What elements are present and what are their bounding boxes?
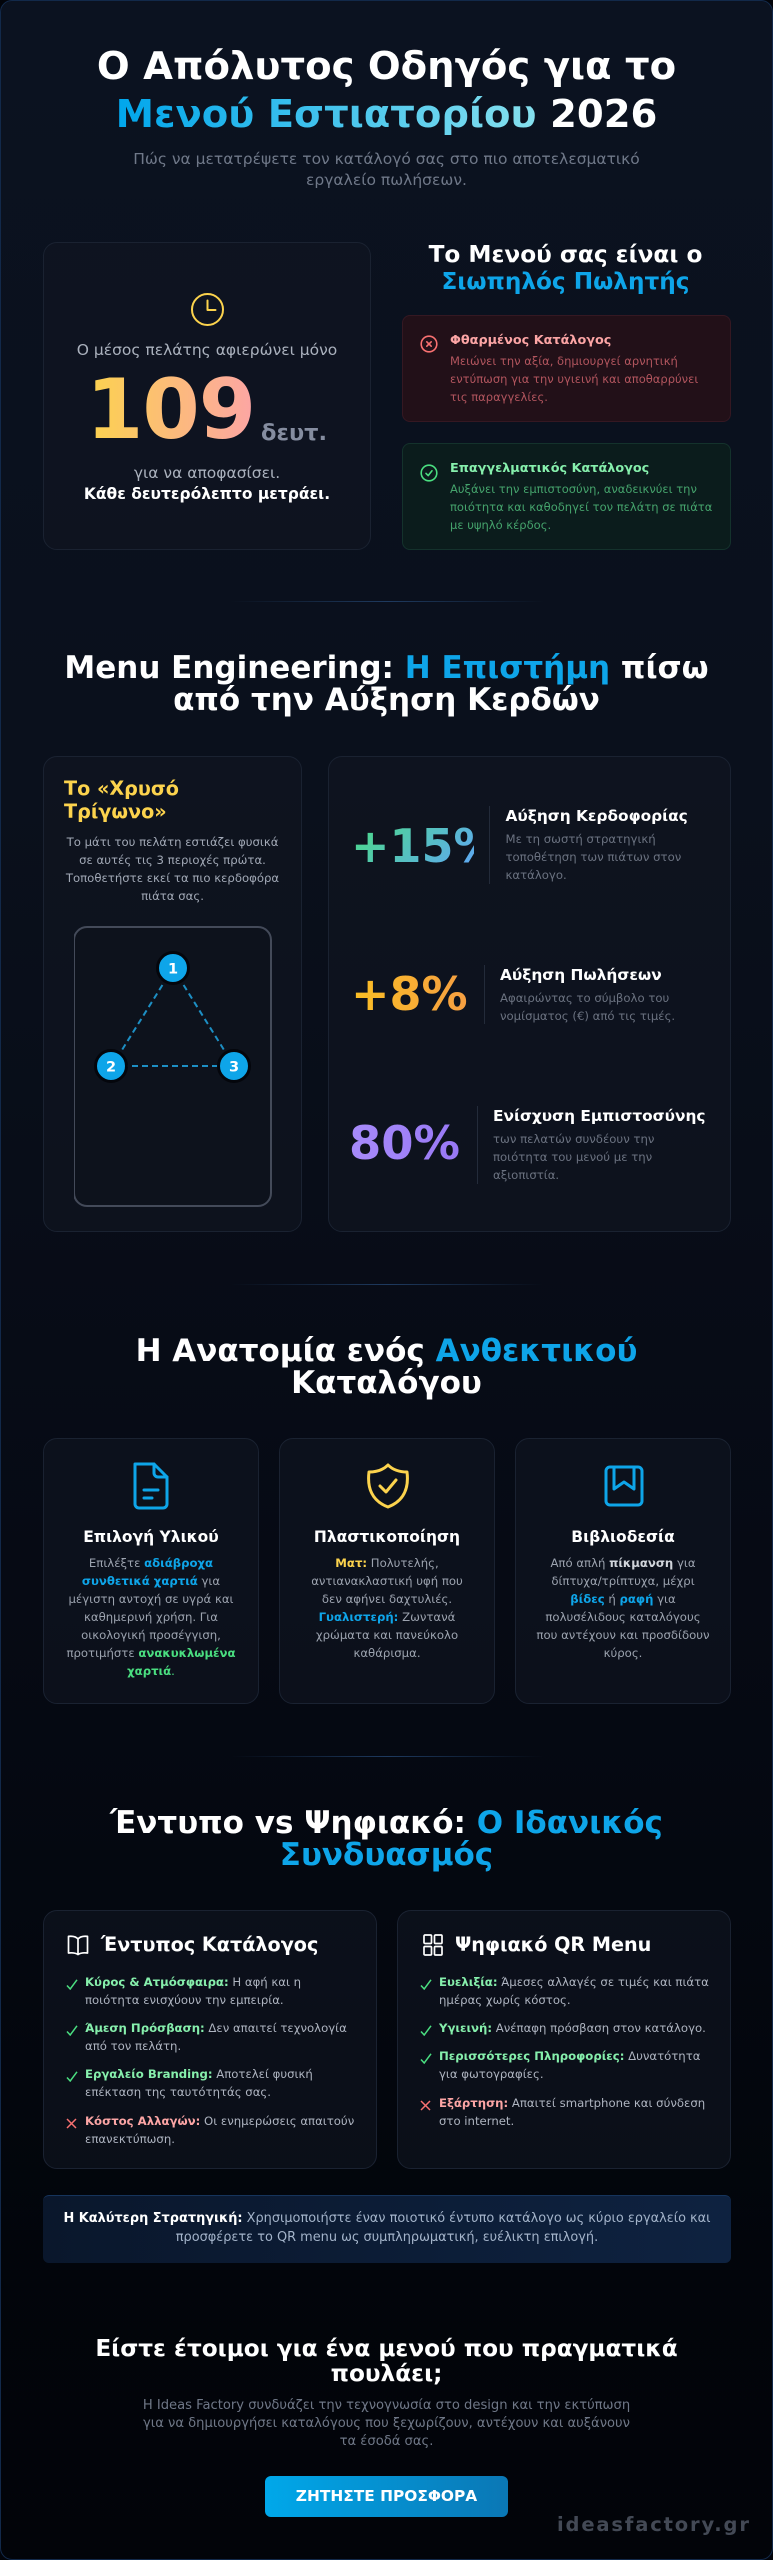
item 1: Ευελιξία: Άμεσες αλλαγές σε τιμές και πιάτα bbox=[439, 1975, 709, 1989]
heading: anatomy: Η Ανατομία ενός Ανθεκτικού bbox=[136, 1333, 637, 1369]
check 1 bbox=[420, 1979, 432, 1990]
panel: print catalogue bbox=[43, 1910, 377, 2169]
item 3: Περισσότερες Πληροφορίες: Δυνατότητα bbox=[439, 2049, 700, 2063]
callout text bbox=[43, 2210, 731, 2247]
card title: Βιβλιοδεσία bbox=[571, 1528, 675, 1546]
panel heading: Ψηφιακό QR Menu bbox=[455, 1933, 651, 1956]
card: lamination bbox=[279, 1438, 495, 1704]
card text: οικολογική προσέγγιση, bbox=[81, 1628, 221, 1642]
hotspot 2: 2 bbox=[106, 1060, 116, 1076]
description: κατάλογο. bbox=[506, 868, 567, 882]
intro text: Ο μέσος πελάτης αφιερώνει μόνο bbox=[77, 341, 337, 359]
panel: digital QR menu bbox=[397, 1910, 731, 2169]
card text: τις παραγγελίες. bbox=[450, 390, 548, 404]
watermark: ideasfactory.gr bbox=[557, 2513, 751, 2536]
description: Αύξηση Πωλήσεων bbox=[500, 966, 662, 984]
phone diagram bbox=[74, 926, 272, 1207]
pros and cons list bbox=[420, 1975, 709, 2128]
card text: Γυαλιστερή: Ζωντανά bbox=[319, 1610, 455, 1624]
callout text: προσφέρετε το QR menu ως συμπληρωματική, ευέλικτη επιλογή. bbox=[176, 2230, 598, 2244]
panel text: πιάτα σας. bbox=[141, 889, 204, 903]
icon: book bbox=[604, 1466, 644, 1506]
panel: stats bbox=[328, 756, 731, 1232]
heading: call to action: Είστε έτοιμοι για ένα μενού που πραγματικά bbox=[95, 2335, 678, 2362]
item 4 bbox=[439, 2094, 705, 2130]
card: material bbox=[43, 1438, 259, 1704]
subtitle bbox=[133, 150, 640, 189]
call to action text: για να δημιουργήσει καταλόγους που ξεχωρίζουν, αντέχουν και αυξάνουν bbox=[143, 2416, 630, 2431]
check 2 bbox=[66, 2025, 78, 2036]
card text: καθημερινή χρήση. Για bbox=[84, 1610, 218, 1624]
title bbox=[97, 44, 676, 137]
card text: που αντέχουν και προσδίδουν bbox=[536, 1628, 710, 1642]
title: Μενού Εστιατορίου 2026 bbox=[116, 92, 657, 137]
description: των πελατών συνδέουν την bbox=[493, 1132, 654, 1146]
item 1: ημέρας χωρίς κόστος. bbox=[439, 1993, 571, 2007]
heading: print vs digital: Έντυπο vs Ψηφιακό: Ο Ιδανικός bbox=[110, 1805, 663, 1841]
callout: best strategy bbox=[43, 2195, 731, 2263]
icon: clock bbox=[191, 293, 224, 326]
card text bbox=[66, 1556, 236, 1678]
item 2: Άμεση Πρόσβαση: Δεν απαιτεί τεχνολογία bbox=[85, 2021, 347, 2035]
heading: silent salesman: Το Μενού σας είναι ο bbox=[429, 241, 702, 268]
card text: χαρτιά. bbox=[127, 1664, 175, 1678]
card text: Από απλή πίκμανση για bbox=[550, 1556, 696, 1570]
description: Με τη σωστή στρατηγική bbox=[506, 832, 656, 846]
panel text bbox=[66, 835, 279, 903]
call to action text bbox=[1, 2397, 772, 2452]
panel heading: Το «Χρυσό bbox=[64, 777, 179, 800]
card text: πολυσέλιδους καταλόγους bbox=[545, 1610, 701, 1624]
card text bbox=[450, 354, 698, 404]
card title: Πλαστικοποίηση bbox=[314, 1528, 460, 1546]
card text: κύρος. bbox=[604, 1646, 642, 1660]
closing text: Κάθε δευτερόλεπτο μετράει. bbox=[84, 485, 330, 503]
cross 4 bbox=[66, 2118, 76, 2128]
item 1 bbox=[85, 1975, 301, 2007]
unit: δευτ. bbox=[261, 420, 327, 446]
card text: δεν αφήνει δαχτυλιές. bbox=[322, 1592, 452, 1606]
item 2 bbox=[85, 2021, 347, 2053]
card text: εντύπωση για την υγιεινή και αποθαρρύνει bbox=[450, 372, 698, 386]
card text: συνθετικά χαρτιά για bbox=[82, 1574, 220, 1588]
panel heading: Τρίγωνο» bbox=[64, 800, 167, 822]
card text: με υψηλό κέρδος. bbox=[450, 518, 551, 532]
check 1 bbox=[66, 1979, 78, 1990]
title: Ο Απόλυτος Οδηγός για το bbox=[97, 44, 676, 89]
item 3 bbox=[439, 2047, 700, 2083]
icon: x circle bbox=[420, 335, 438, 353]
value: 80% bbox=[349, 1116, 460, 1170]
check 2 bbox=[420, 2025, 432, 2036]
panel text: Τοποθετήστε εκεί τα πιο κερδοφόρα bbox=[66, 871, 279, 885]
description: τοποθέτηση των πιάτων στον bbox=[506, 850, 681, 864]
hotspot 1: 1 bbox=[168, 962, 178, 978]
description bbox=[476, 1106, 706, 1184]
description: Αφαιρώντας το σύμβολο του bbox=[500, 991, 669, 1005]
panel text: σε αυτές τις 3 περιοχές πρώτα. bbox=[79, 853, 266, 867]
item 4: στο internet. bbox=[439, 2114, 514, 2128]
description bbox=[489, 806, 688, 884]
heading: menu engineering: από την Αύξηση Κερδών bbox=[173, 682, 600, 718]
icon: shield bbox=[367, 1463, 409, 1508]
card text: ποιότητα και καθοδηγεί τον πελάτη σε πιάτα bbox=[450, 500, 712, 514]
panel: professional catalogue bbox=[402, 443, 731, 550]
call to action text: τα έσοδά σας. bbox=[340, 2434, 433, 2449]
heading: call to action: πουλάει; bbox=[331, 2360, 442, 2387]
panel heading bbox=[64, 777, 179, 822]
description: Αύξηση Κερδοφορίας bbox=[506, 807, 688, 825]
description: ποιότητα του μενού με την bbox=[493, 1150, 652, 1164]
card text bbox=[311, 1556, 463, 1660]
item 1: Κύρος & Ατμόσφαιρα: Η αφή και η bbox=[85, 1975, 301, 1989]
panel: 109 seconds bbox=[43, 242, 371, 550]
card text: Ματ: Πολυτελής, bbox=[335, 1556, 439, 1570]
closing text: για να αποφασίσει. bbox=[134, 464, 280, 482]
panel: golden triangle bbox=[43, 756, 302, 1232]
item 3: Εργαλείο Branding: Αποτελεί φυσική bbox=[85, 2067, 313, 2081]
button: ΖΗΤΗΣΤΕ ΠΡΟΣΦΟΡΑ bbox=[296, 2487, 477, 2505]
stat +8% bbox=[351, 965, 675, 1024]
panel: worn catalogue bbox=[402, 315, 731, 422]
card text: δίπτυχα/τρίπτυχα, μέχρι bbox=[551, 1574, 695, 1588]
heading: call to action bbox=[1, 2336, 772, 2386]
heading: silent salesman: Σιωπηλός Πωλητής bbox=[441, 268, 690, 295]
hotspot 3 bbox=[218, 1050, 250, 1082]
card text: βίδες ή ραφή για bbox=[570, 1592, 676, 1606]
hotspot 1 bbox=[158, 952, 188, 984]
callout text: Η Καλύτερη Στρατηγική: Χρησιμοποιήστε έναν ποιοτικό έντυπο κατάλογο ως κύριο εργαλείο και bbox=[63, 2211, 711, 2226]
item 4: Εξάρτηση: Απαιτεί smartphone και σύνδεση bbox=[439, 2096, 705, 2110]
pros and cons list bbox=[66, 1975, 354, 2146]
hotspot 3: 3 bbox=[229, 1060, 239, 1076]
card: binding bbox=[515, 1438, 731, 1704]
panel heading: Έντυπος Κατάλογος bbox=[101, 1933, 318, 1956]
item 2: Υγιεινή: Ανέπαφη πρόσβαση στον κατάλογο. bbox=[439, 2021, 706, 2035]
item 2: από τον πελάτη. bbox=[85, 2039, 181, 2053]
card text: προτιμήστε ανακυκλωμένα bbox=[66, 1646, 236, 1660]
description: Ενίσχυση Εμπιστοσύνης bbox=[493, 1107, 706, 1125]
card title: Επιλογή Υλικού bbox=[83, 1528, 219, 1546]
card text bbox=[450, 482, 712, 532]
card text: Αυξάνει την εμπιστοσύνη, αναδεικνύει την bbox=[450, 482, 697, 496]
hotspot 2 bbox=[96, 1050, 126, 1082]
closing text bbox=[84, 464, 330, 503]
card text: καθάρισμα. bbox=[353, 1646, 421, 1660]
value: +8% bbox=[351, 967, 468, 1021]
item 4: Κόστος Αλλαγών: Οι ενημερώσεις απαιτούν bbox=[85, 2114, 354, 2128]
stat 80% bbox=[349, 1106, 706, 1184]
item 4 bbox=[85, 2114, 354, 2146]
heading: menu engineering: Menu Engineering: Η Επιστήμη πίσω bbox=[64, 650, 709, 686]
icon: check circle bbox=[420, 464, 438, 482]
card title: Επαγγελματικός Κατάλογος bbox=[450, 461, 649, 476]
icon: open book bbox=[68, 1935, 88, 1956]
card text bbox=[536, 1556, 710, 1660]
heading: menu engineering bbox=[64, 650, 709, 718]
card title: Φθαρμένος Κατάλογος bbox=[450, 333, 611, 348]
description bbox=[484, 965, 675, 1024]
stat +15% bbox=[351, 806, 688, 884]
heading: anatomy: Καταλόγου bbox=[291, 1365, 482, 1401]
heading: silent salesman bbox=[428, 241, 702, 295]
card text: Επιλέξτε αδιάβροχα bbox=[89, 1556, 213, 1570]
heading: print vs digital bbox=[109, 1805, 663, 1873]
icon: document bbox=[134, 1462, 168, 1510]
heading: print vs digital: Συνδυασμός bbox=[280, 1837, 493, 1873]
card text: αντιανακλαστική υφή που bbox=[311, 1574, 463, 1588]
card text: Μειώνει την αξία, δημιουργεί αρνητική bbox=[450, 354, 678, 368]
check 3 bbox=[66, 2071, 78, 2082]
button bbox=[265, 2476, 508, 2517]
description: νομίσματος (€) από τις τιμές. bbox=[500, 1009, 675, 1023]
check 3 bbox=[420, 2053, 432, 2064]
cross 4 bbox=[420, 2100, 431, 2111]
item 3: επέκταση της ταυτότητάς σας. bbox=[85, 2085, 271, 2099]
big number 109: 109 bbox=[86, 362, 255, 458]
call to action text: Η Ideas Factory συνδυάζει την τεχνογνωσία στο design και την εκτύπωση bbox=[143, 2398, 630, 2413]
item 3 bbox=[85, 2067, 313, 2099]
description: αξιοπιστία. bbox=[493, 1168, 559, 1182]
subtitle: εργαλείο πωλήσεων. bbox=[306, 171, 467, 189]
item 4: επανεκτύπωση. bbox=[85, 2132, 175, 2146]
item 1: ποιότητα ενισχύουν την εμπειρία. bbox=[85, 1993, 284, 2007]
heading: anatomy bbox=[136, 1333, 637, 1401]
card text: μέγιστη αντοχή σε υγρά και bbox=[68, 1592, 234, 1606]
card text: χρώματα και πανεύκολο bbox=[316, 1628, 458, 1642]
item 1 bbox=[439, 1975, 709, 2007]
panel text: Το μάτι του πελάτη εστιάζει φυσικά bbox=[67, 835, 278, 849]
item 3: για φωτογραφίες. bbox=[439, 2067, 544, 2081]
icon: grid bbox=[423, 1934, 443, 1956]
subtitle: Πώς να μετατρέψετε τον κατάλογό σας στο πιο αποτελεσματικό bbox=[133, 150, 640, 168]
